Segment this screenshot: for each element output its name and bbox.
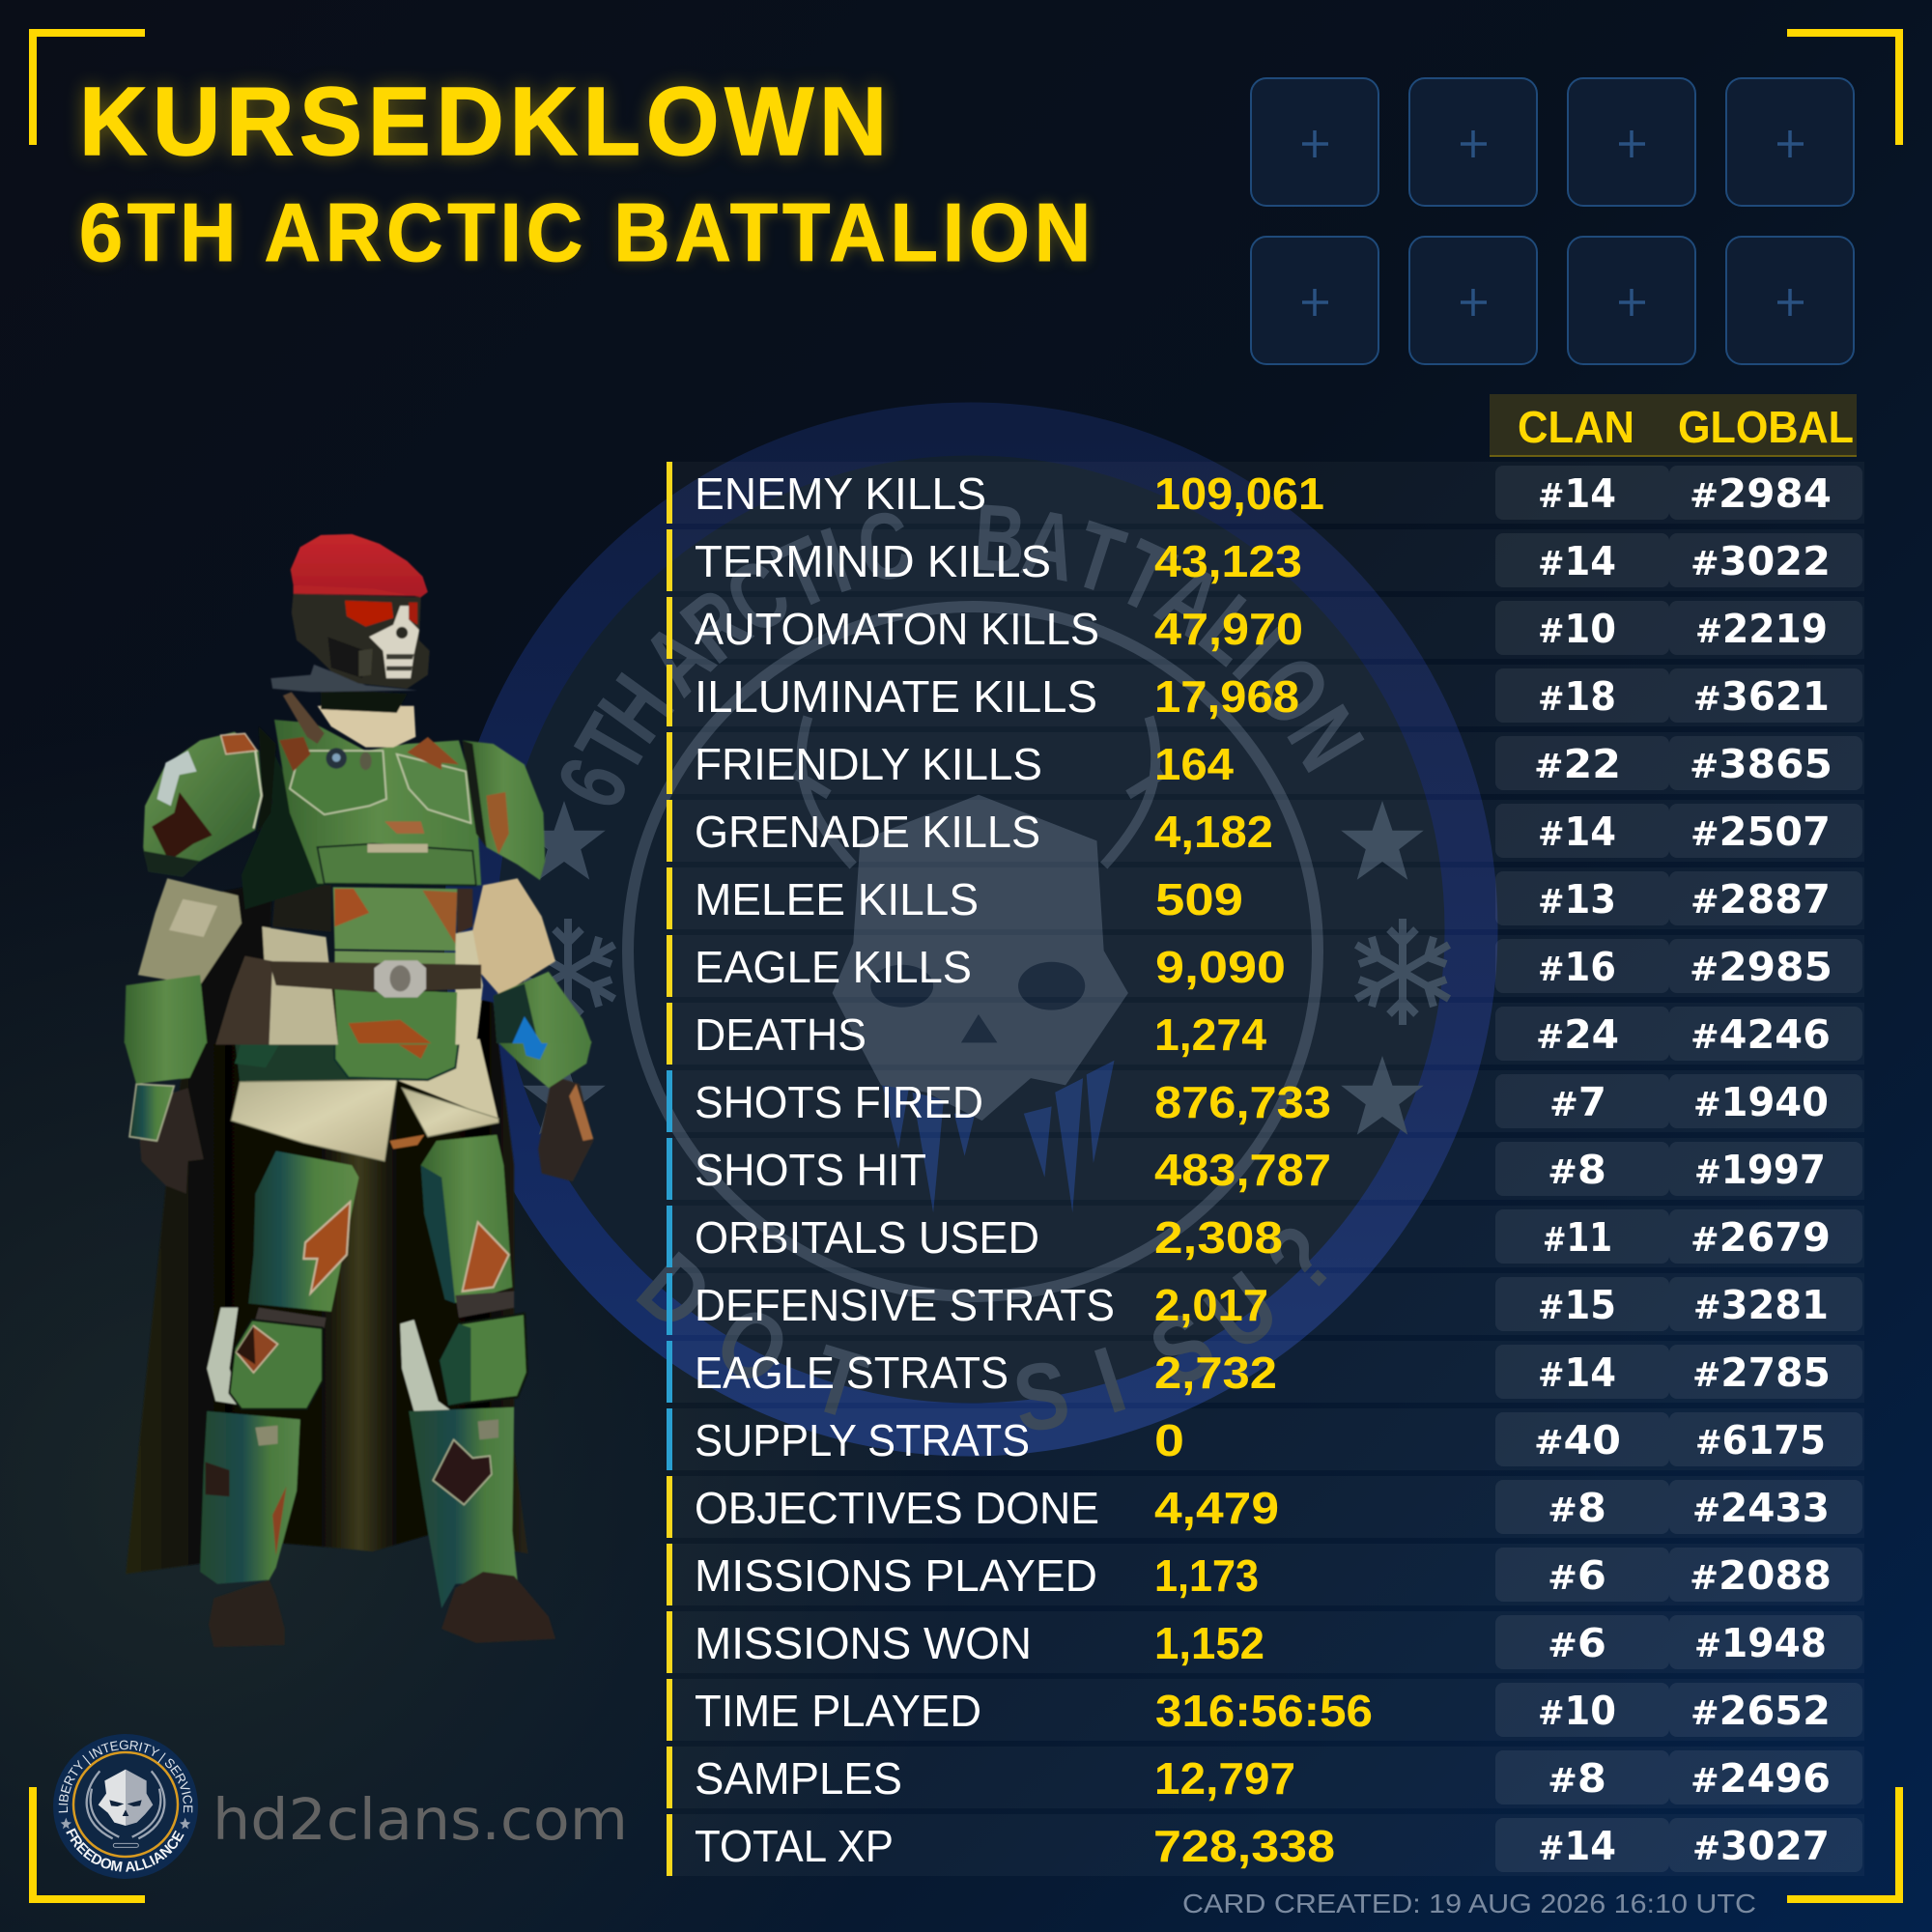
row: enemy kills: #2984 — [1690, 470, 1832, 517]
watermark: battalion emblem: S — [1007, 1341, 1076, 1453]
row: eagle strats: #14 — [1538, 1350, 1616, 1396]
row: time played: #2652 — [1690, 1688, 1831, 1734]
row: terminid kills: #3022 — [1690, 538, 1831, 584]
row: melee kills: #13 — [1538, 876, 1616, 923]
row: shots fired: 876,733 — [1154, 1077, 1331, 1127]
row: enemy kills: #14 — [1538, 470, 1616, 517]
character: helldiver in green armour — [125, 534, 593, 1647]
watermark: battalion emblem: T — [800, 1325, 878, 1440]
row: illuminate kills: ILLUMINATE KILLS — [695, 671, 1097, 722]
subtitle: clan name: 6TH ARCTIC BATTALION — [79, 187, 1095, 279]
row: eagle kills — [667, 935, 1864, 997]
website text: hd2clans.com — [213, 1786, 628, 1853]
watermark: battalion emblem: I — [810, 508, 863, 613]
watermark: battalion emblem: O — [699, 1285, 805, 1407]
row: deaths: DEATHS — [695, 1009, 867, 1060]
row: friendly kills — [667, 732, 1864, 794]
row: shots hit: 483,787 — [1154, 1145, 1331, 1195]
row: missions won — [667, 1611, 1864, 1673]
row: missions played — [667, 1544, 1864, 1605]
footer: card created date: CARD CREATED: 19 AUG 2026 16:10 UTC — [1182, 1889, 1756, 1918]
row: eagle kills: 9,090 — [1155, 942, 1286, 992]
row: grenade kills: 4,182 — [1154, 807, 1273, 857]
corner bracket: top right — [1787, 29, 1903, 145]
row: illuminate kills — [667, 665, 1864, 726]
row: enemy kills: ENEMY KILLS — [695, 469, 986, 519]
row: enemy kills — [667, 462, 1864, 524]
row: illuminate kills: 17,968 — [1154, 671, 1299, 722]
row: orbitals used: ORBITALS USED — [695, 1212, 1039, 1263]
watermark: battalion emblem: T — [1062, 502, 1135, 615]
row: friendly kills: 164 — [1154, 739, 1234, 789]
row: missions played: #6 — [1548, 1552, 1606, 1599]
row: objectives done: 4,479 — [1154, 1483, 1279, 1533]
row: eagle kills: EAGLE KILLS — [695, 942, 972, 992]
table header: clan and global — [1490, 394, 1857, 457]
watermark: battalion emblem: T — [1104, 521, 1187, 634]
stats table — [667, 462, 1864, 1876]
row: eagle strats: #2785 — [1692, 1350, 1831, 1396]
medal slot 8 — [1726, 237, 1854, 364]
row: objectives done: #2433 — [1692, 1485, 1830, 1531]
watermark: battalion emblem: R — [664, 569, 769, 683]
medal slot 2 — [1409, 78, 1537, 206]
watermark: battalion emblem: N — [1266, 690, 1383, 787]
medal slot 3 — [1568, 78, 1695, 206]
row: supply strats: #6175 — [1695, 1417, 1826, 1463]
watermark: battalion emblem: D — [618, 1234, 731, 1350]
row: objectives done — [667, 1476, 1864, 1538]
row: shots hit: SHOTS HIT — [695, 1145, 926, 1195]
row: automaton kills: AUTOMATON KILLS — [695, 604, 1099, 654]
row: total xp: 728,338 — [1153, 1821, 1335, 1871]
row: automaton kills: #10 — [1538, 606, 1616, 652]
row: grenade kills — [667, 800, 1864, 862]
row: total xp: TOTAL XP — [695, 1821, 894, 1871]
row: supply strats: SUPPLY STRATS — [695, 1415, 1030, 1465]
row: deaths — [667, 1003, 1864, 1065]
table header: clan and global: CLAN — [1518, 402, 1634, 452]
row: illuminate kills: #18 — [1538, 673, 1616, 720]
row: automaton kills: 47,970 — [1154, 604, 1303, 654]
row: terminid kills — [667, 529, 1864, 591]
logo: freedom alliance seal: LIBERTY | INTEGRITY | SERVICE — [58, 1741, 193, 1812]
watermark: battalion emblem: C — [849, 491, 921, 604]
row: friendly kills: #22 — [1534, 741, 1621, 787]
row: eagle strats: 2,732 — [1154, 1348, 1277, 1398]
watermark: battalion emblem: B — [971, 485, 1029, 593]
watermark: battalion emblem: A — [1014, 490, 1085, 602]
row: deaths: 1,274 — [1154, 1009, 1266, 1060]
row: grenade kills: #2507 — [1690, 809, 1831, 855]
row: missions played: 1,173 — [1154, 1550, 1259, 1601]
row: missions played: #2088 — [1690, 1552, 1832, 1599]
row: orbitals used: #2679 — [1690, 1214, 1831, 1261]
row: supply strats: #40 — [1534, 1417, 1621, 1463]
watermark: battalion emblem: S — [1134, 1291, 1231, 1409]
row: melee kills: #2887 — [1690, 876, 1831, 923]
watermark: battalion emblem: O — [1234, 637, 1350, 746]
title: player name: KURSEDKLOWN — [79, 68, 893, 176]
row: shots fired: #7 — [1549, 1079, 1606, 1125]
medal slot 1 — [1251, 78, 1378, 206]
row: supply strats — [667, 1408, 1864, 1470]
watermark: battalion emblem: 6 — [537, 744, 649, 823]
row: objectives done: OBJECTIVES DONE — [695, 1483, 1099, 1533]
medal slot 7 — [1568, 237, 1695, 364]
watermark: battalion emblem: U — [1187, 1253, 1297, 1372]
row: samples: SAMPLES — [695, 1753, 902, 1804]
watermark: battalion emblem: T — [556, 700, 669, 790]
logo: freedom alliance seal — [53, 1734, 198, 1879]
row: time played: #10 — [1538, 1688, 1616, 1734]
row: shots hit — [667, 1138, 1864, 1200]
row: samples: 12,797 — [1154, 1753, 1295, 1804]
row: grenade kills: #14 — [1538, 809, 1616, 855]
row: eagle kills: #16 — [1538, 944, 1616, 990]
medal slots grid — [1251, 78, 1854, 364]
row: shots hit: #1997 — [1694, 1147, 1826, 1193]
watermark: battalion emblem: L — [1181, 576, 1281, 685]
row: terminid kills: #14 — [1538, 538, 1616, 584]
row: missions played: MISSIONS PLAYED — [695, 1550, 1097, 1601]
row: total xp: #3027 — [1692, 1823, 1830, 1869]
row: missions won: #1948 — [1694, 1620, 1827, 1666]
row: objectives done: #8 — [1548, 1485, 1606, 1531]
row: missions won: 1,152 — [1154, 1618, 1264, 1668]
row: time played: 316:56:56 — [1155, 1686, 1373, 1736]
watermark: battalion emblem: I — [1084, 1327, 1137, 1435]
row: defensive strats: #15 — [1538, 1282, 1616, 1328]
watermark: battalion emblem: I — [1214, 610, 1301, 698]
torso, arms and head — [125, 534, 591, 1044]
row: total xp — [667, 1814, 1864, 1876]
medal slot 6 — [1409, 237, 1537, 364]
row: supply strats: 0 — [1154, 1415, 1184, 1465]
watermark: battalion emblem: ? — [1245, 1206, 1356, 1313]
watermark: battalion emblem: C — [709, 539, 807, 656]
cape — [126, 942, 527, 1574]
row: orbitals used — [667, 1206, 1864, 1267]
row: illuminate kills: #3621 — [1693, 673, 1830, 720]
row: friendly kills: #3865 — [1690, 741, 1833, 787]
watermark: battalion emblem: A — [1140, 543, 1239, 659]
corner bracket: top left — [29, 29, 145, 145]
watermark: battalion emblem — [470, 429, 1471, 1453]
row: deaths: #4246 — [1690, 1011, 1831, 1058]
row: shots fired: SHOTS FIRED — [695, 1077, 983, 1127]
logo: freedom alliance seal: FREEDOM ALLIANCE — [66, 1828, 185, 1872]
row: samples — [667, 1747, 1864, 1808]
row: terminid kills: 43,123 — [1154, 536, 1302, 586]
row: defensive strats: DEFENSIVE STRATS — [695, 1280, 1115, 1330]
corner bracket: bottom left — [29, 1787, 145, 1903]
row: terminid kills: TERMINID KILLS — [695, 536, 1051, 586]
row: grenade kills: GRENADE KILLS — [695, 807, 1040, 857]
row: shots fired — [667, 1070, 1864, 1132]
row: melee kills: 509 — [1155, 874, 1243, 924]
row: time played: TIME PLAYED — [695, 1686, 981, 1736]
row: time played — [667, 1679, 1864, 1741]
watermark: battalion emblem: A — [623, 604, 734, 715]
row: eagle kills: #2985 — [1690, 944, 1833, 990]
row: melee kills — [667, 867, 1864, 929]
row: defensive strats: #3281 — [1693, 1282, 1829, 1328]
row: automaton kills: #2219 — [1695, 606, 1828, 652]
row: melee kills: MELEE KILLS — [695, 874, 979, 924]
row: deaths: #24 — [1536, 1011, 1619, 1058]
row: samples: #2496 — [1690, 1755, 1831, 1802]
table header: clan and global: GLOBAL — [1678, 402, 1854, 452]
corner bracket: bottom right — [1787, 1787, 1903, 1903]
watermark: battalion emblem: H — [579, 657, 694, 760]
row: eagle strats — [667, 1341, 1864, 1403]
row: missions won: #6 — [1548, 1620, 1606, 1666]
medal slot 4 — [1726, 78, 1854, 206]
row: shots hit: #8 — [1548, 1147, 1606, 1193]
row: missions won: MISSIONS WON — [695, 1618, 1032, 1668]
row: orbitals used: 2,308 — [1154, 1212, 1283, 1263]
row: defensive strats — [667, 1273, 1864, 1335]
row: shots fired: #1940 — [1693, 1079, 1829, 1125]
row: eagle strats: EAGLE STRATS — [695, 1348, 1009, 1398]
row: defensive strats: 2,017 — [1154, 1280, 1268, 1330]
row: automaton kills — [667, 597, 1864, 659]
watermark: battalion emblem: T — [761, 517, 844, 631]
row: samples: #8 — [1548, 1755, 1606, 1802]
row: orbitals used: #11 — [1543, 1214, 1612, 1261]
legs and coat skirt — [125, 1039, 593, 1647]
row: total xp: #14 — [1538, 1823, 1616, 1869]
row: enemy kills: 109,061 — [1154, 469, 1324, 519]
row: friendly kills: FRIENDLY KILLS — [695, 739, 1042, 789]
medal slot 5 — [1251, 237, 1378, 364]
